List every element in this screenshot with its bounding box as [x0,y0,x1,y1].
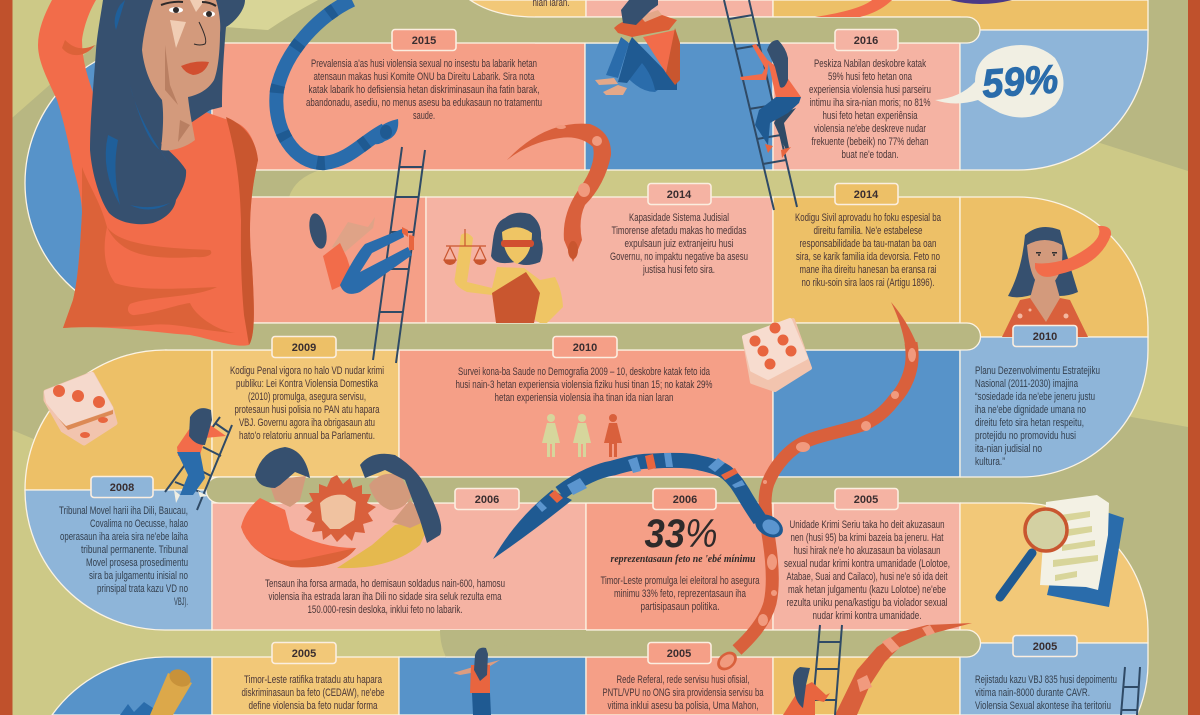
face [502,227,532,264]
text: 2016: Peskiza Nabilan deskobre katak [814,58,927,70]
illustration: red snake top [507,124,611,262]
text: 2005 serious crimes: mak hetan julgamentu (kazu Lolotoe) ne'ebe [788,584,946,596]
statistic 33%: 33% [644,512,718,556]
text: 2005 CAVR: Rejistadu kazu VBJ 835 husi depoimentu [975,674,1117,686]
illustration: ladder at 2016 [724,0,797,210]
label 2008: 2008 [110,482,134,494]
text: 2009: protesaun husi polisia no PAN atu hapara [234,404,380,416]
label 2005 CEDAW [272,642,336,664]
icon: top snake tail and purple shape [815,0,1012,17]
text: 2010 plan: Planu Dezenvolvimentu Estratejiku [975,365,1100,377]
text: 2005 serious crimes: sexual nudar krimi kontra umanidade (Lolotoe, [784,558,950,570]
scales [444,229,486,265]
illustration: fighting women [241,447,441,568]
label 2005 CEDAW: 2005 [292,648,316,660]
text: 2016: buat ne'e todan. [842,149,898,161]
illustration: documents and magnifier [1000,495,1124,607]
text: 2010 survey: hetan experiensia violensia iha tinan ida nian laran [494,392,674,404]
text: 2009 [230,365,384,442]
text: 2015: saude. [413,110,435,122]
text: 2010 plan: protejidu no promovidu husi [975,430,1076,442]
label 2015: 2015 [412,35,436,47]
text: 2005 CAVR: Violensia Sexual akontese iha teritoriu [975,700,1111,712]
text: 2010 plan: Nasional (2011-2030) imajina [975,378,1078,390]
text: 2015: abandonadu, asediu, no menus asesu ba edukasaun no tratamentu [306,97,542,109]
text: 2015: Prevalensia a'as husi violensia sexual no insestu ba labarik hetan [311,58,537,70]
text: 2014 civil code: no riku-soin sira laos rai (Artigu 1896). [802,277,934,289]
eyes and brows [161,2,216,45]
text: 2006 electoral stat: partisipasaun politika. [640,601,720,613]
illustration: justice woman [444,213,563,323]
text: 2006 electoral stat: Timor-Leste promulga lei eleitoral ho asegura [600,575,760,587]
illustration: woman silenced by snake [1002,226,1111,337]
text: 2006 electoral stat: minimu 33% feto, reprezentasaun iha [614,588,746,600]
fist [320,495,356,529]
text: 2005 referral network [602,674,764,712]
text: 2014 civil code: Kodigu Sivil aprovadu ho foku espesial ba [795,212,941,224]
text: 2005 serious crimes: Atabae, Suai and Cailaco), husi ne'e só ida deit [786,571,948,583]
label 2005 referral [648,642,711,664]
text: 2015: katak labarik ho defisiensia hetan diskriminasaun iha fatin barak, [308,84,540,96]
impact star [304,475,376,542]
illustration: balancing woman [453,648,500,715]
text: 2014 civil code: mane iha direitu hanesan ba eransa rai [800,264,936,276]
connecting bands [165,17,980,657]
illustration: ladder in row 2 [373,147,425,363]
label 2014 civil code: 2014 [854,189,879,201]
text: 2005 referral network: PNTL/VPU no ONG sira providensia servisu ba [602,687,764,699]
text: 2014 judicial: Timorense afetadu makas ho medidas [612,225,746,237]
sweater [38,0,258,346]
text: 2008: Covalima no Oecusse, halao [90,518,188,530]
illustration: climbing woman 2008 [174,408,226,503]
label 2006 electoral [653,488,716,510]
label 2014 judicial: 2014 [667,189,692,201]
text: 2014 civil code: responsabilidade ba tau-matan ba oan [800,238,937,250]
label 2014 judicial [648,184,711,204]
illustration: ladder 2008 [165,417,232,510]
text: 2008: VBJ). [174,596,188,608]
text: 2008: prinsipal trata kazu VD no [97,583,188,595]
text: 2005 serious crimes [784,519,950,622]
text: 2006 armed forces: 150.000-resin desloka, inklui feto no labarik. [308,604,462,616]
text: 2014 civil code [795,212,941,289]
snake tongue [1035,226,1111,277]
label 2008 [91,476,153,498]
illustration: falling woman [306,212,414,294]
illustration: bottom ladder [812,625,842,715]
label 2010 survey [553,336,617,358]
dress [492,272,540,323]
text: 2005 serious crimes: nudar krimi kontra umanidade. [812,610,922,622]
label 2016 [835,30,898,50]
illustration: stick and burst [120,666,193,715]
text: 2010 survey: husi nain-3 hetan experiensia violensia fiziku husi tinan 15; no katak 29% [456,379,713,391]
text: 2005 CEDAW: diskriminasaun ba feto (CEDAW), ne'ebe [242,687,385,699]
text: 2015: atensaun makas husi Komite ONU ba Direitu Labarik. Sira nota [314,71,535,83]
icon: three women pictogram [542,414,622,457]
illustration: bottom climbing woman [783,667,830,715]
text: 2008: Tribunal Movel harii iha Dili, Baucau, [59,505,188,517]
label 2016: 2016 [854,35,878,47]
text: 2014 judicial: Kapasidade Sistema Judisial [629,212,729,224]
text: 2005 CEDAW: define violensia ba feto nudar forma [248,700,378,712]
label 2005 CAVR [1013,636,1077,656]
text: 2005 referral network: vitima inklui asesu ba polisia, Uma Mahon, [608,700,758,712]
text: 2014 judicial: Governu, no impaktu negative ba asesu [610,251,748,263]
text: 2008: sira ba julgamentu inisial no [89,570,188,582]
label 2005 crimes unit: 2005 [854,494,878,506]
text: 2016: violensia ne'ebe deskreve nudar [814,123,926,135]
illustration: dice right [744,320,810,390]
speech bubble 59%: 59% [981,57,1060,107]
arm and body [454,233,563,323]
text: 2005 referral network: Rede Referal, rede servisu husi ofisial, [616,674,750,686]
text: 2005 serious crimes: Unidade Krimi Seriu taka ho deit akuzasaun [790,519,945,531]
text: 2016 [809,58,931,161]
label 2005 CAVR: 2005 [1033,641,1057,653]
text: 2010 plan: iha ne'ebe dignidade umana no [975,404,1086,416]
text: 2010 plan: “sosiedade ida ne'ebe jeneru justu [975,391,1095,403]
text: 2006 electoral stat [600,512,760,613]
text: 2009: (2010) promulga, asegura servisu, [248,391,366,403]
label 2010 survey: 2010 [573,342,597,354]
text: 2009: Kodigu Penal vigora no halo VD nudar krimi [230,365,384,377]
head [369,119,398,144]
hair [90,0,245,224]
scars and neck creases [170,20,186,48]
label 2015 [392,30,456,50]
text: 2009: publiku: Lei Kontra Violensia Domestika [236,378,378,390]
left woman [241,498,356,567]
text: 2010 plan: direitu feto sira hetan respeitu, [975,417,1084,429]
magnifier [1000,553,1032,597]
text: 2008 [59,505,188,608]
text: 2014 judicial: expulsaun juiz extranjeiru husi [624,238,734,250]
text: 2005 CAVR: vitima nain-8000 durante CAVR. [975,687,1090,699]
illustration: blue snake centre [493,453,787,559]
text: 2009: VBJ. Governu agora iha obrigasaun atu [239,417,375,429]
text: 2005 serious crimes: nen (husi 95) ba krimi bazeia ba jeneru. Hat [790,532,944,544]
text: 2006 armed forces [265,578,505,616]
illustration: red snake centre [713,302,917,674]
text: 2009: hato'o relatoriu annual ba Parlamentu. [239,430,375,442]
text: 2008: operasaun iha areia sira ne'ebe laiha [60,531,188,543]
text: 2008: Movel prosesa prosedimentu [86,557,188,569]
text: 2015 [306,58,542,122]
text: 2010 survey [456,366,713,404]
text: 2010 plan [975,365,1100,468]
hair [491,213,543,265]
text: 2005 serious crimes: husi hirak ne'e ho akuzasaun ba violasaun [794,545,941,557]
text: 2006 armed forces: violensia iha estrada laran iha Dili no sidade sira seluk rezulta ema [268,591,502,603]
illustration: ladder bottom right [1121,667,1140,715]
illustration: climbing woman at 2016 [740,40,801,158]
text: 2010 plan: kultura.” [975,456,1005,468]
text: 2005 CAVR [975,674,1117,712]
text: 2005 CEDAW: Timor-Leste ratifika tratadu atu hapara [244,674,382,686]
text: 2010 plan: ita-nian judisial no [975,443,1042,455]
text: 2008: tribunal permanente. Tribunal [81,544,188,556]
text: 2006 armed forces: Tensaun iha forsa armada, ho demisaun soldadus nain-600, hamosu [265,578,505,590]
label 2006 armed forces [455,488,519,510]
text: 2006 electoral stat: reprezentasaun feto ne 'ebé mínimu [610,553,756,565]
illustration: blue snake top [276,0,398,163]
illustration: sitting woman [595,0,680,95]
label 2010 plan [1013,326,1077,346]
illustration: dice left [46,374,115,443]
text: 2016: intimu iha sira-nian moris; no 81% [810,97,931,109]
illustration: lower right snake [835,623,972,715]
label 2009: 2009 [292,342,316,354]
year labels [91,30,1077,664]
lips [181,62,209,75]
text: 2005 CEDAW [242,674,385,712]
label 2006 electoral: 2006 [673,494,697,506]
text: 2014 judicial [610,212,748,276]
label 2005 referral: 2005 [667,648,691,660]
head [713,648,741,674]
label 2009 [272,336,336,358]
text: 2016: frekuente (bebeik) no 77% dehan [812,136,929,148]
speech bubble 59% [935,45,1064,118]
text: 2005 serious crimes: rezulta uniku pena/kastigu ba violador sexual [786,597,948,609]
text: 2014 civil code: sira, se karik familia ida devorsia. Feto no [796,251,940,263]
text: 2016: experiensia violensia husi parseiru [809,84,931,96]
face and neck [142,0,220,151]
head [751,510,787,542]
sweater shadows [62,40,258,345]
text: 2010 survey: Survei kona-ba Saude no Demografia 2009 – 10, deskobre katak feto ida [458,366,710,378]
label 2005 crimes unit [835,488,898,510]
text: 2016: 59% husi feto hetan ona [828,71,912,83]
hair highlights [106,0,170,210]
text: 2016: husi feto hetan experiênsia [822,110,918,122]
illustration: large woman [38,0,258,346]
label 2014 civil code [835,184,898,204]
label 2010 plan: 2010 [1033,331,1057,343]
right woman [337,520,427,568]
text: 2014 civil code: direitu familia. Ne'e estabelese [814,225,923,237]
label 2006 armed forces: 2006 [475,494,499,506]
text: 2014 judicial: justisa husi feto sira. [642,264,715,276]
